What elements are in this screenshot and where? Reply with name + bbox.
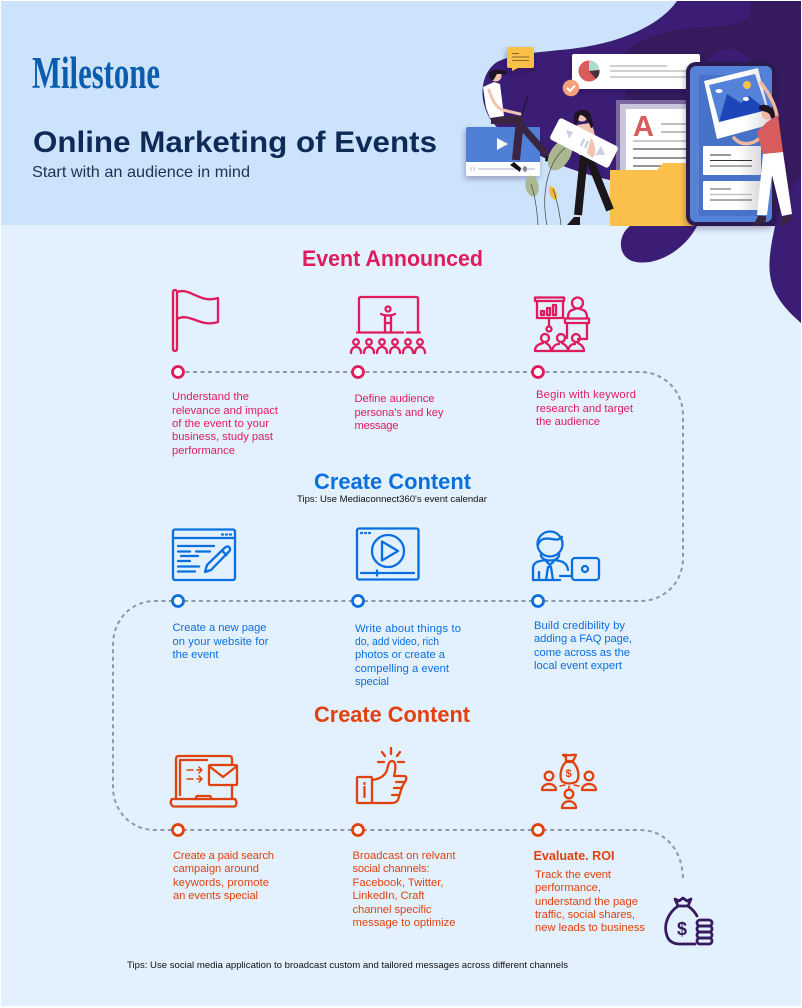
step text: paid search: Create a paid search (173, 850, 274, 862)
step text: paid search: keywords, promote (173, 877, 269, 889)
step text: keyword research: Begin with keyword (536, 389, 636, 401)
step text: paid search: an events special (173, 890, 258, 902)
photo (704, 68, 772, 139)
icon: expert with laptop (533, 532, 599, 580)
header band (1, 1, 801, 225)
section heading: create content blue: Create Content (314, 469, 472, 494)
sitting man (483, 70, 559, 172)
folder (610, 163, 695, 226)
icon: browser with pencil (173, 530, 235, 580)
icon: flag (173, 290, 218, 351)
plants (523, 135, 577, 225)
icon: video player (357, 528, 418, 580)
step text: new page: the event (172, 649, 219, 661)
step text: understand relevance: performance (172, 445, 235, 457)
section heading: event announced: Event Announced (302, 246, 483, 271)
phone cards (703, 146, 761, 210)
step text: keyword research: the audience (536, 416, 600, 428)
step text: define persona: message (354, 420, 398, 432)
step text: track performance: understand the page (535, 896, 638, 908)
speech bubble (507, 47, 534, 71)
step text: social channels: channel specific (352, 904, 432, 916)
step text: understand relevance: business, study past (172, 431, 274, 443)
title: Online Marketing of Events (33, 126, 437, 159)
icon: laptop with email (171, 756, 237, 806)
step text: keyword research: research and target (536, 403, 634, 415)
icon: roi people: $ (566, 768, 572, 780)
step text: things to do: photos or create a (355, 649, 446, 661)
man with photo (734, 83, 793, 226)
logo: Milestone (32, 48, 160, 98)
video card (466, 127, 540, 176)
step text: credibility: Build credibility by (534, 620, 625, 632)
step text: things to do: compelling a event (355, 663, 450, 675)
icon: money bag and coins (666, 898, 712, 944)
icon: thumbs up (357, 748, 406, 803)
step text: track performance: Track the event (535, 869, 612, 881)
step text: define persona: persona's and key (354, 407, 444, 419)
step text: social channels: Broadcast on relvant (352, 850, 456, 862)
step text: understand relevance: Understand the (172, 391, 249, 403)
tip: event calendar: Tips: Use Mediaconnect360's event calendar (297, 494, 487, 504)
step heading: evaluate roi: Evaluate. ROI (534, 849, 614, 863)
step text: track performance: traffic, social shares, (535, 909, 635, 921)
step text: things to do: Write about things to (355, 623, 461, 635)
step text: social channels: Facebook, Twitter, (352, 877, 444, 889)
step text: things to do: do, add video, rich (355, 636, 439, 648)
step text: credibility: come across as the (534, 647, 630, 659)
icon: keynote speaker (535, 298, 589, 351)
phone (686, 62, 776, 226)
check badge (563, 80, 579, 96)
woman with remote (549, 110, 619, 225)
step text: social channels: message to optimize (352, 917, 456, 929)
chart card (572, 54, 700, 89)
purple blob background (482, 1, 801, 323)
icon: money bag and coins: $ (677, 919, 687, 939)
dashed timeline (113, 372, 683, 880)
step text: social channels: LinkedIn, Craft (352, 890, 425, 902)
step text: social channels: social channels: (352, 863, 430, 875)
timeline dots: row 1 (172, 366, 544, 378)
timeline dots: row 3 (172, 824, 544, 836)
step text: paid search: campaign around (173, 863, 259, 875)
step text: credibility: adding a FAQ page, (534, 633, 632, 645)
step text: things to do: special (355, 676, 389, 688)
bottom tip: Tips: Use social media application to broadcast custom and tailored messages across different channels (127, 960, 568, 971)
step text: new page: on your website for (172, 636, 269, 648)
document (616, 100, 690, 172)
subtitle: Start with an audience in mind (32, 164, 250, 181)
step text: track performance: new leads to business (535, 922, 645, 934)
section heading: create content orange: Create Content (314, 702, 471, 727)
step text: define persona: Define audience (354, 393, 434, 405)
timeline dots: row 2 (172, 596, 544, 606)
hero illustration (466, 47, 793, 226)
icon: roi people (542, 755, 596, 808)
step text: new page: Create a new page (172, 622, 266, 634)
step text: credibility: local event expert (534, 660, 623, 672)
step text: understand relevance: of the event to your (172, 418, 269, 430)
step text: understand relevance: relevance and impact (172, 405, 279, 417)
step text: track performance: performance, (535, 882, 601, 894)
icon: presentation audience (351, 297, 425, 353)
document: A (633, 111, 654, 143)
